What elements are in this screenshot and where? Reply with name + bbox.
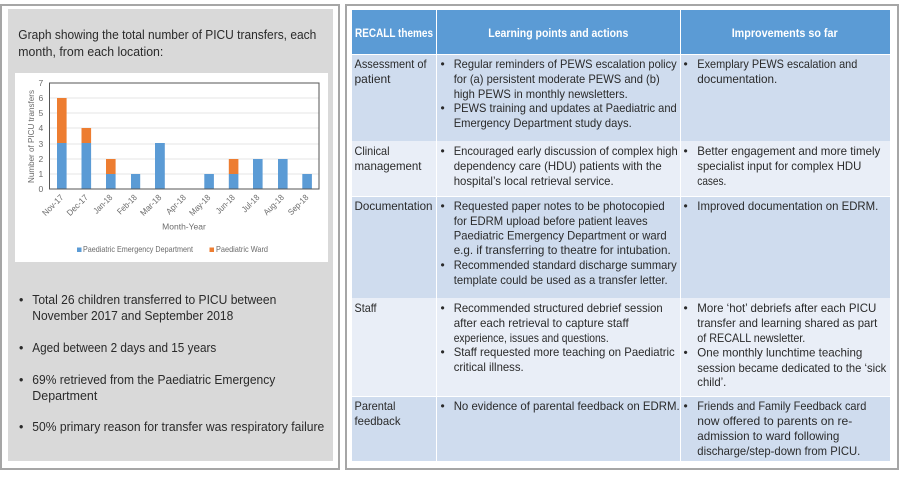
table row: Parental feedback: Friends and Family Feedback card — [697, 399, 866, 413]
text block: key statistics: • — [19, 373, 23, 387]
text block: key statistics: Department — [32, 389, 98, 403]
table row: Parental feedback: No evidence of parental feedback on EDRM. — [454, 399, 680, 413]
table row: Assessment of patient: • — [440, 101, 445, 115]
table row: Parental feedback: discharge/step-down from PICU. — [697, 444, 860, 458]
table row: Assessment of patient: Exemplary PEWS escalation and — [697, 57, 857, 71]
text block: key statistics: • — [19, 420, 23, 434]
table row: Staff: after each retrieval to capture staff — [454, 316, 629, 330]
table row: Staff: One monthly lunchtime teaching — [697, 346, 862, 360]
table row: Staff: of RECALL newsletter. — [697, 331, 805, 345]
table row: Clinical management: • — [684, 144, 688, 158]
table row: Documentation: • — [440, 199, 445, 213]
text block: key statistics: November 2017 and September 2018 — [32, 309, 233, 323]
y-axis labels — [38, 78, 44, 194]
table row: Clinical management: specialist input for complex HDU — [697, 159, 861, 173]
heading: graph description: Graph showing the total number of PICU transfers, each — [18, 28, 316, 42]
table row: Documentation: Paediatric Emergency Department or ward — [454, 228, 667, 242]
text block: key statistics: Total 26 children transferred to PICU between — [32, 293, 276, 307]
table header: Learning points and actions — [488, 26, 629, 40]
table row: Assessment of patient: Emergency Department study days. — [454, 116, 632, 130]
table row: Assessment of patient: documentation. — [697, 72, 777, 86]
x-axis title: Month-Year — [162, 222, 206, 232]
text block: key statistics: • — [19, 341, 23, 355]
x-axis month labels: Jul-18 — [239, 192, 262, 214]
table row: Clinical management: hospital’s local retrieval service. — [454, 174, 614, 188]
table row: Parental feedback: • — [440, 399, 445, 413]
table row: Clinical management — [352, 141, 890, 196]
table header — [352, 10, 890, 54]
x-axis month labels: Apr-18 — [164, 192, 188, 216]
table row: Documentation: for EDRM upload before patient leaves — [454, 214, 648, 228]
y-axis labels: 4 — [38, 123, 44, 133]
x-axis month labels: Jun-18 — [214, 192, 237, 216]
y-axis title: Number of PICU transfers — [26, 90, 36, 183]
table row: Staff: • — [440, 301, 445, 315]
table row: Assessment of patient: • — [440, 57, 445, 71]
table row: Clinical management: cases. — [697, 174, 726, 188]
table row: Staff: child’. — [697, 375, 726, 389]
table row: Staff: Staff — [354, 301, 377, 315]
table row: Documentation: Documentation — [354, 199, 432, 213]
text block: key statistics — [19, 293, 324, 434]
table row: Staff — [352, 298, 890, 396]
table row: Clinical management: • — [440, 144, 445, 158]
table row: Staff: • — [684, 346, 688, 360]
table header: Improvements so far — [732, 26, 838, 40]
table row: Staff: Staff requested more teaching on Paediatric — [454, 345, 675, 359]
table row: Staff: Recommended structured debrief session — [454, 301, 663, 315]
y-axis labels: 6 — [38, 93, 44, 103]
table row: Documentation — [352, 197, 890, 298]
text block: key statistics: 50% primary reason for transfer was respiratory failure — [32, 420, 324, 434]
table row: Documentation: • — [440, 258, 445, 272]
legend: Paediatric Ward — [216, 244, 268, 254]
table row: Staff: experience, issues and questions. — [454, 331, 609, 345]
y-axis labels: 2 — [38, 154, 44, 164]
table row: Parental feedback — [352, 397, 890, 461]
heading: graph description — [18, 28, 316, 59]
table row: Staff: More ‘hot’ debriefs after each PICU — [697, 301, 876, 315]
table row: Parental feedback: Parental — [354, 399, 396, 413]
table row: Assessment of patient: patient — [354, 72, 391, 86]
table row: Assessment of patient: for (a) persistent moderate PEWS and (b) — [454, 72, 660, 86]
x-axis month labels — [40, 192, 311, 218]
text block: key statistics: • — [19, 293, 23, 307]
table row: Staff: • — [684, 301, 688, 315]
table row: Assessment of patient — [352, 55, 890, 141]
text block: key statistics: Aged between 2 days and 15 years — [32, 341, 216, 355]
table row: Staff: • — [440, 345, 445, 359]
bars: Paediatric Emergency Department — [57, 143, 312, 189]
x-axis month labels: Sep-18 — [286, 192, 311, 217]
table row: Staff: session became dedicated to the ‘sick — [697, 361, 887, 375]
table row: Documentation: template could be used as a transfer letter. — [454, 273, 668, 287]
y-axis labels: 5 — [38, 108, 44, 118]
panel: RECALL themes table — [346, 5, 898, 469]
table row: Assessment of patient: PEWS training and updates at Paediatric and — [454, 101, 677, 115]
table row: Documentation: e.g. if transferring to theatre for intubation. — [454, 243, 671, 257]
table row: Clinical management: management — [354, 159, 422, 173]
y-axis labels: 3 — [38, 139, 44, 149]
x-axis month labels: Aug-18 — [261, 192, 286, 217]
panel: PICU transfer summary — [1, 5, 339, 469]
table row: Documentation: Requested paper notes to be photocopied — [454, 199, 665, 213]
x-axis month labels: Mar-18 — [138, 192, 164, 218]
table row: Assessment of patient: • — [684, 57, 688, 71]
table row: Assessment of patient: Assessment of — [354, 57, 427, 71]
table row: Documentation: • — [684, 199, 688, 213]
bars: Paediatric Ward — [57, 98, 238, 174]
table row: Clinical management: Clinical — [354, 144, 390, 158]
heading: graph description: month, from each location: — [18, 45, 163, 59]
table row: Parental feedback: admission to ward following — [697, 429, 839, 443]
table row: Documentation: Improved documentation on EDRM. — [697, 199, 878, 213]
table row: Staff: critical illness. — [454, 360, 524, 374]
y-axis labels: 0 — [38, 184, 44, 194]
table row: Assessment of patient: Regular reminders of PEWS escalation policy — [454, 57, 677, 71]
bar chart: PICU transfers per month by location — [15, 73, 328, 262]
y-axis labels: 7 — [38, 78, 44, 88]
x-axis month labels: Jan-18 — [91, 192, 115, 216]
x-axis month labels: Feb-18 — [115, 192, 139, 216]
text block: key statistics: 69% retrieved from the Paediatric Emergency — [32, 373, 276, 387]
table row: Documentation: Recommended standard discharge summary — [454, 258, 677, 272]
x-axis month labels: May-18 — [187, 192, 213, 218]
table row: Clinical management: Encouraged early discussion of complex high — [454, 144, 678, 158]
legend: Paediatric Emergency Department — [83, 244, 194, 254]
table row: Parental feedback: • — [684, 399, 688, 413]
table row: Clinical management: dependency care (HDU) patients with the — [454, 159, 662, 173]
table row: Parental feedback: now offered to parents on re- — [697, 414, 852, 428]
table row: Clinical management: Better engagement and more timely — [697, 144, 880, 158]
y-axis labels: 1 — [38, 169, 44, 179]
table row: Assessment of patient: high PEWS in monthly newsletters. — [454, 87, 628, 101]
x-axis month labels: Nov-17 — [40, 192, 66, 218]
table header: RECALL themes — [355, 26, 433, 40]
table row: Staff: transfer and learning shared as part — [697, 316, 878, 330]
x-axis month labels: Dec-17 — [64, 192, 90, 218]
legend — [77, 244, 268, 254]
table row: Parental feedback: feedback — [354, 414, 401, 428]
